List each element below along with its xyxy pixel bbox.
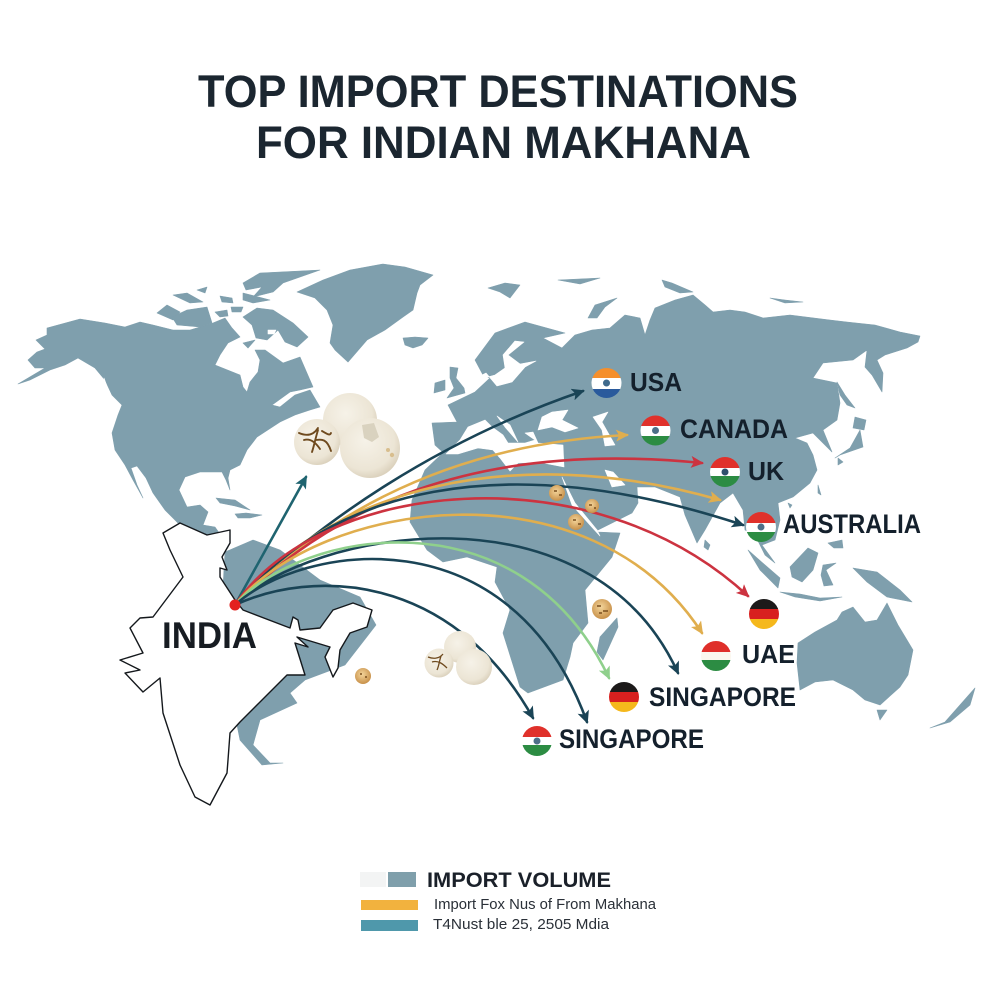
map: Sri Lanka — [704, 540, 710, 550]
arrow: to South Asia — [235, 474, 720, 605]
label: UK: UK — [748, 456, 784, 486]
India outline — [120, 523, 372, 805]
world map — [18, 264, 975, 765]
flag: UAE label — [701, 641, 732, 672]
arrow: to Singapore — [235, 542, 609, 678]
legend swatch: teal — [361, 920, 418, 931]
map: inland seas — [104, 330, 625, 536]
map: Tasmania and New Zealand — [877, 688, 975, 728]
label: Singapore second: SINGAPORE — [559, 724, 704, 754]
map: Africa — [410, 440, 620, 693]
map: United Kingdom and Ireland — [434, 367, 465, 398]
arrow: to Canada — [235, 435, 627, 605]
legend text: line one: Import Fox Nus of From Makhana — [434, 897, 657, 913]
makhana crumbs — [355, 485, 612, 684]
map: Japan — [835, 417, 866, 465]
arrow: to Germany — [235, 498, 748, 605]
trade route arrows — [235, 391, 748, 722]
arrow: to UK — [235, 459, 702, 605]
flag: Germany, unlabelled — [749, 599, 780, 630]
map: Indonesia and Philippines — [748, 485, 912, 602]
flag: Singapore label, India colours — [522, 726, 553, 757]
title: TOP IMPORT DESTINATIONS — [198, 66, 798, 117]
title — [198, 66, 798, 168]
map: Australia — [797, 603, 913, 705]
map: Arctic islands — [157, 270, 320, 348]
map: South America — [220, 540, 376, 765]
label: Australia: AUSTRALIA — [783, 509, 921, 539]
India origin dot — [230, 600, 240, 610]
legend swatch: orange — [361, 900, 418, 910]
label: USA: USA — [630, 367, 682, 397]
map: Eurasia — [432, 295, 920, 563]
flag: Singapore label, Germany colours — [609, 682, 640, 713]
arrow: to southern route — [235, 559, 587, 722]
map: Sakhalin — [837, 382, 855, 408]
title: FOR INDIAN MAKHANA — [256, 117, 751, 168]
makhana cluster: small — [424, 631, 492, 685]
legend swatch: volume scale — [360, 872, 416, 887]
map: Madagascar — [597, 618, 618, 660]
flag: Australia label — [746, 512, 777, 543]
label: UAE: UAE — [742, 639, 795, 669]
India label: INDIA — [162, 615, 257, 656]
map: Greenland — [297, 264, 433, 362]
arrow: to UAE — [235, 515, 702, 633]
map: North America — [18, 318, 320, 548]
label: Singapore: SINGAPORE — [649, 682, 796, 712]
arrow: to Australia — [235, 485, 743, 605]
label: Canada: CANADA — [680, 414, 788, 444]
arrow: to USA — [235, 391, 583, 605]
makhana cluster: large — [294, 393, 400, 478]
legend heading: IMPORT VOLUME — [427, 868, 611, 892]
legend — [360, 868, 657, 933]
map: Caribbean — [216, 498, 262, 518]
map: Iceland — [403, 337, 428, 348]
arrow: to Singapore south — [235, 586, 533, 718]
flag: UK label — [710, 457, 741, 488]
flag: USA label (Indian saffron flag) — [592, 368, 622, 398]
map: Arctic Russia islands — [488, 278, 803, 318]
flag: Canada label — [640, 416, 670, 446]
arrow: North Atlantic — [235, 477, 306, 605]
legend text: line two: T4Nust ble 25, 2505 Mdia — [433, 917, 610, 933]
arrow: to Indian Ocean — [235, 538, 678, 673]
